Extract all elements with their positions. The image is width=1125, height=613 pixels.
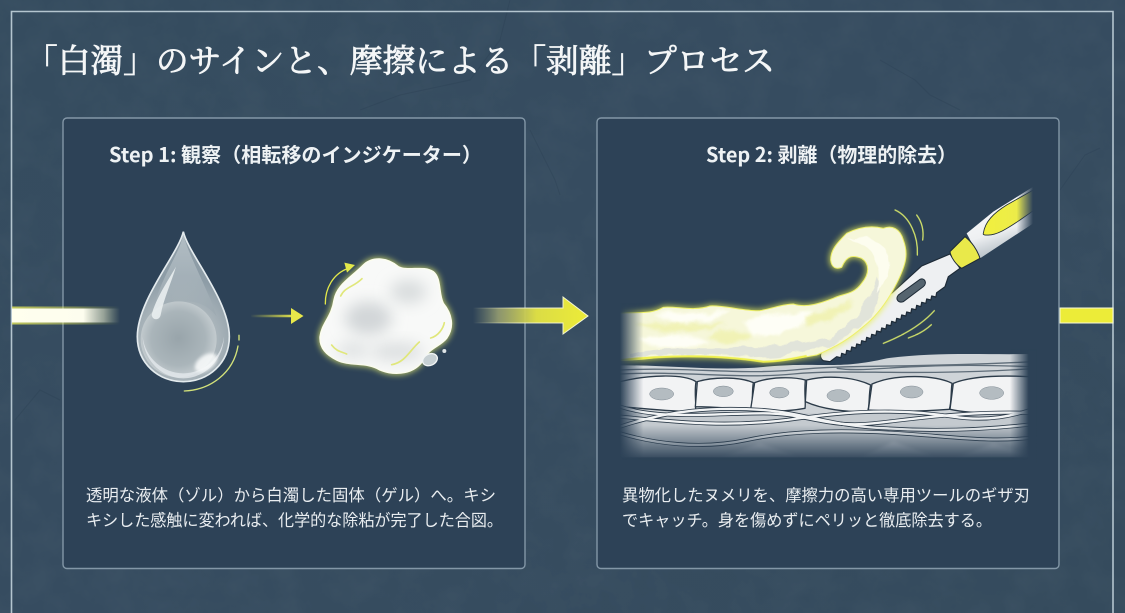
step 2 description: でキャッチ。身を傷めずにペリッと徹底除去する。: [622, 507, 992, 531]
handle end fade: [1017, 180, 1040, 247]
step 2 heading: Step 2: 剥離（物理的除去）: [706, 139, 957, 168]
cells: [620, 376, 1040, 413]
fibers: [638, 414, 1014, 434]
yellow collar: [950, 237, 980, 268]
illustration: skin layers and scraper: [610, 180, 1040, 463]
step 1 heading: Step 1: 観察（相転移のインジケーター）: [109, 139, 482, 168]
arrow: sol to gel: [251, 308, 304, 324]
handle grip: [983, 190, 1033, 235]
icon: white gel blob: [320, 259, 451, 373]
handle: [967, 187, 1033, 258]
step 1 description: [86, 482, 503, 531]
motion lines: [883, 210, 934, 343]
skin layers: [620, 352, 1040, 460]
arrow: incoming left bar: [12, 306, 120, 324]
edge fades: [610, 303, 1037, 463]
rotation arrow: [325, 268, 348, 304]
yellow accents: [332, 279, 444, 365]
step 1 description: キシした感触に変われば、化学的な除粘が完了した合図。: [86, 507, 503, 531]
serrated blade: [820, 254, 960, 362]
icon: transparent liquid drop: [137, 232, 239, 391]
motion arc: [184, 335, 239, 391]
step 1 description: 透明な液体（ゾル）から白濁した固体（ゲル）へ。キシ: [86, 482, 496, 506]
droplets: [421, 351, 439, 368]
step 2 description: 異物化したヌメリを、摩擦力の高い専用ツールのギザ刃: [622, 482, 1030, 506]
arrow: step 1 to step 2: [473, 297, 588, 334]
peeled slime wave: [620, 227, 906, 362]
arrow: outgoing right bar: [1060, 308, 1113, 323]
panel: step 2 removal: [597, 118, 1059, 568]
panel: step 1 observation: [63, 118, 525, 568]
title: 「白濁」のサインと、摩擦による「剥離」プロセス: [25, 43, 775, 80]
step 2 description: [622, 482, 1030, 531]
nuclei: [650, 386, 1004, 402]
scraper tool: [820, 180, 1040, 362]
